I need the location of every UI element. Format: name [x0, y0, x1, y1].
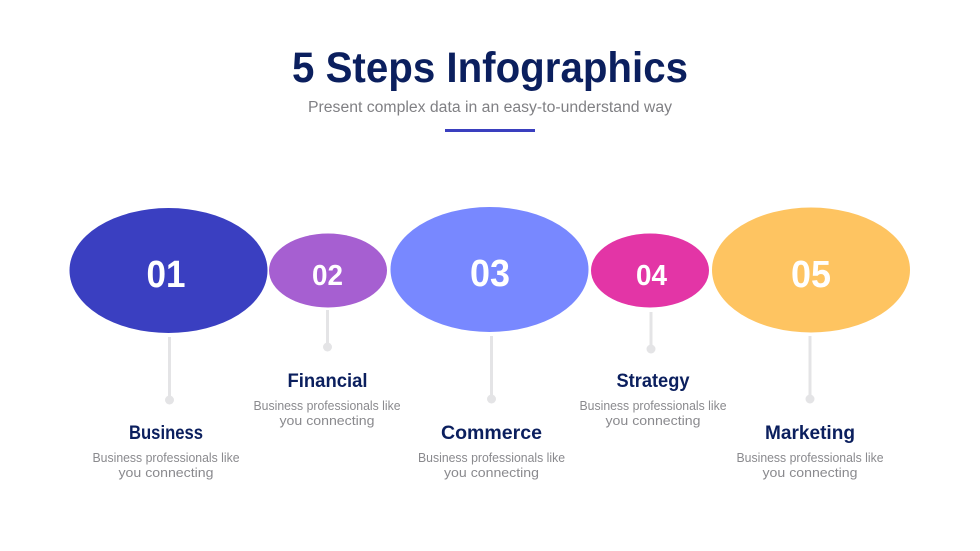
heading financial: Financial — [288, 371, 368, 392]
number 03: 03 — [470, 253, 510, 295]
description financial: Business professionals like — [254, 398, 400, 413]
ellipse 03 — [390, 207, 588, 332]
step 02: financial — [254, 234, 400, 428]
title: 5 Steps Infographics — [292, 45, 688, 92]
connector 03 — [487, 336, 496, 404]
description commerce: you connecting — [444, 466, 539, 480]
ellipse 04 — [591, 234, 709, 308]
description strategy: you connecting — [606, 414, 701, 428]
description business: Business professionals like — [92, 450, 240, 465]
step 04: strategy — [580, 234, 726, 428]
ellipse 01 — [70, 208, 268, 333]
connector 02 — [323, 310, 332, 352]
number 01: 01 — [146, 254, 186, 296]
number 04: 04 — [636, 260, 667, 292]
step 03: commerce — [390, 207, 588, 480]
subtitle: Present complex data in an easy-to-understand way — [308, 99, 672, 116]
connector 05 — [806, 336, 814, 404]
description marketing: you connecting — [762, 466, 858, 480]
title underline — [445, 129, 535, 132]
description marketing: Business professionals like — [736, 450, 884, 465]
number 02: 02 — [312, 260, 343, 292]
heading marketing: Marketing — [765, 423, 855, 444]
description financial: you connecting — [280, 414, 375, 428]
step 01: business — [70, 208, 268, 480]
heading business: Business — [129, 423, 203, 444]
heading strategy: Strategy — [616, 371, 690, 392]
ellipse 02 — [269, 234, 387, 308]
description business: you connecting — [118, 466, 214, 480]
description commerce: Business professionals like — [418, 450, 565, 465]
ellipse 05 — [712, 208, 910, 332]
description strategy: Business professionals like — [580, 398, 726, 413]
number 05: 05 — [791, 254, 831, 296]
connector 04 — [646, 312, 656, 354]
connector 01 — [165, 337, 174, 404]
step 05: marketing — [712, 208, 910, 480]
heading commerce: Commerce — [441, 423, 542, 444]
